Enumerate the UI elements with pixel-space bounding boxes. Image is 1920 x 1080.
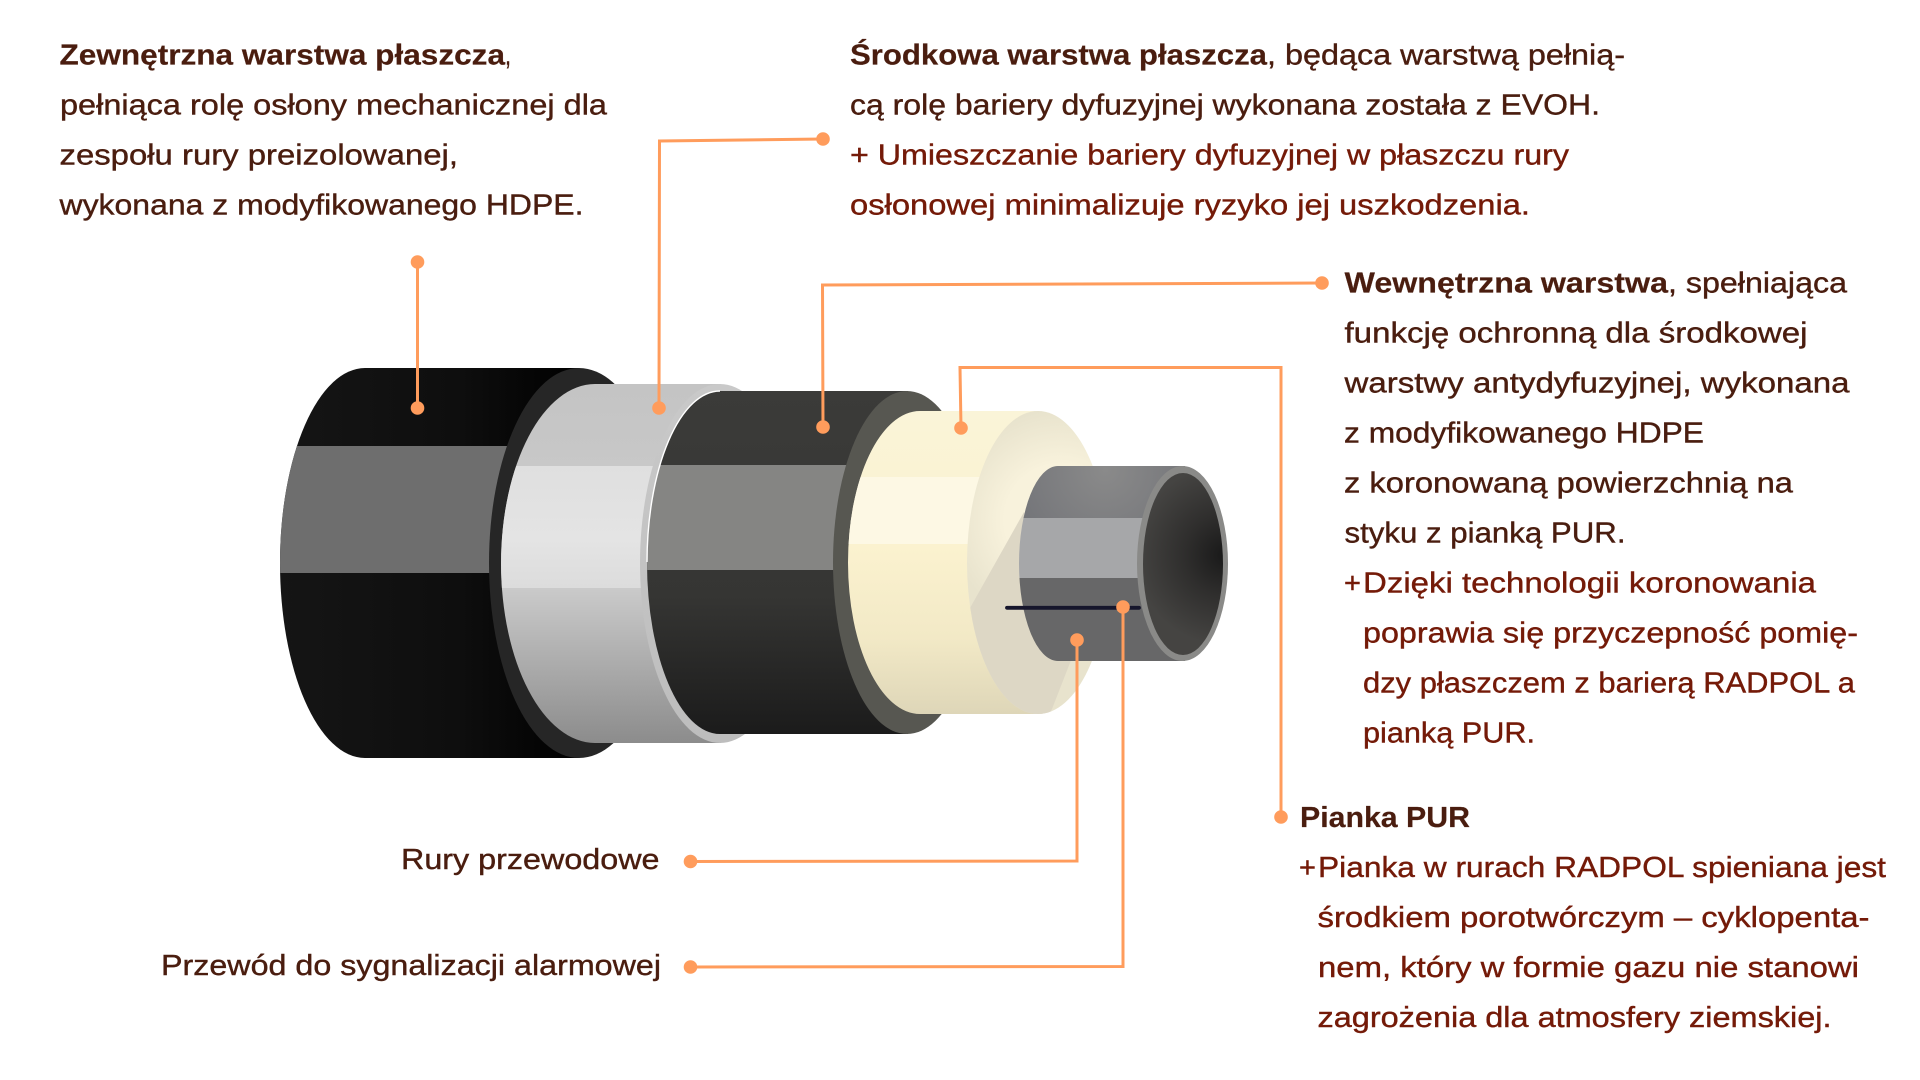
text: inner layer description: + <box>1344 568 1361 600</box>
text: inner layer description: warstwy antydyfuzyjnej, wykonana <box>1343 368 1850 400</box>
text: outer layer description: Zewnętrzna warstwa płaszcza <box>60 40 506 72</box>
text: outer layer description: pełniąca rolę osłony mechanicznej dla <box>60 90 608 122</box>
text: PUR foam description: nem, który w formie gazu nie stanowi <box>1318 952 1859 984</box>
leader: PUR foam <box>954 368 1288 824</box>
text: middle layer description: , będąca warstwą pełnią- <box>1267 40 1625 72</box>
text: outer layer description: wykonana z modyfikowanego HDPE. <box>58 190 584 222</box>
leader: inner layer <box>816 276 1329 434</box>
text: inner layer description: styku z pianką PUR. <box>1344 518 1626 550</box>
text: PUR foam description: Pianka PUR <box>1300 802 1470 834</box>
text: middle layer description: osłonowej minimalizuje ryzyko jej uszkodzenia. <box>850 190 1530 222</box>
text: PUR foam description: + <box>1299 852 1316 884</box>
leader: carrier pipes <box>684 633 1084 868</box>
text: middle layer description <box>850 38 1625 222</box>
leader: alarm wire <box>684 600 1130 974</box>
text: PUR foam description <box>1299 802 1886 1034</box>
text: outer layer description: zespołu rury preizolowanej, <box>60 140 458 172</box>
label: carrier pipes: Rury przewodowe <box>401 844 660 876</box>
text: inner layer description: , spełniająca <box>1668 268 1848 300</box>
text: outer layer description: , <box>505 40 511 72</box>
text: inner layer description: pianką PUR. <box>1363 718 1535 750</box>
layer: inner dark layer <box>646 390 942 734</box>
layer: PUR foam <box>848 411 1093 714</box>
text: PUR foam description: Pianka w rurach RADPOL spieniana jest <box>1318 852 1886 884</box>
text: inner layer description: Dzięki technologii koronowania <box>1363 568 1817 600</box>
text: inner layer description <box>1343 268 1858 750</box>
text: middle layer description: cą rolę bariery dyfuzyjnej wykonana została z EVOH. <box>850 90 1600 122</box>
text: inner layer description: dzy płaszczem z barierą RADPOL a <box>1363 668 1856 700</box>
pipe illustration <box>270 360 1228 770</box>
alarm signal wire <box>1007 606 1139 610</box>
layer: carrier pipe <box>1015 466 1228 661</box>
text: inner layer description: poprawia się przyczepność pomię- <box>1363 618 1858 650</box>
layer: outer jacket <box>280 368 614 758</box>
label: alarm wire: Przewód do sygnalizacji alarmowej <box>161 950 661 982</box>
text: inner layer description: funkcję ochronną dla środkowej <box>1344 318 1808 350</box>
leader: outer jacket <box>411 255 424 415</box>
text: middle layer description: Środkowa warstwa płaszcza <box>850 38 1268 72</box>
text: inner layer description: Wewnętrzna warstwa <box>1344 268 1669 300</box>
text: inner layer description: z modyfikowanego HDPE <box>1344 418 1704 450</box>
text: PUR foam description: środkiem porotwórczym – cyklopenta- <box>1318 902 1870 934</box>
text: middle layer description: + Umieszczanie bariery dyfuzyjnej w płaszczu rury <box>850 140 1570 172</box>
text: PUR foam description: zagrożenia dla atmosfery ziemskiej. <box>1318 1002 1832 1034</box>
leader: middle layer <box>652 132 830 415</box>
layer: middle barrier layer <box>501 384 745 743</box>
text: outer layer description <box>58 40 608 222</box>
text: inner layer description: z koronowaną powierzchnią na <box>1344 468 1794 500</box>
